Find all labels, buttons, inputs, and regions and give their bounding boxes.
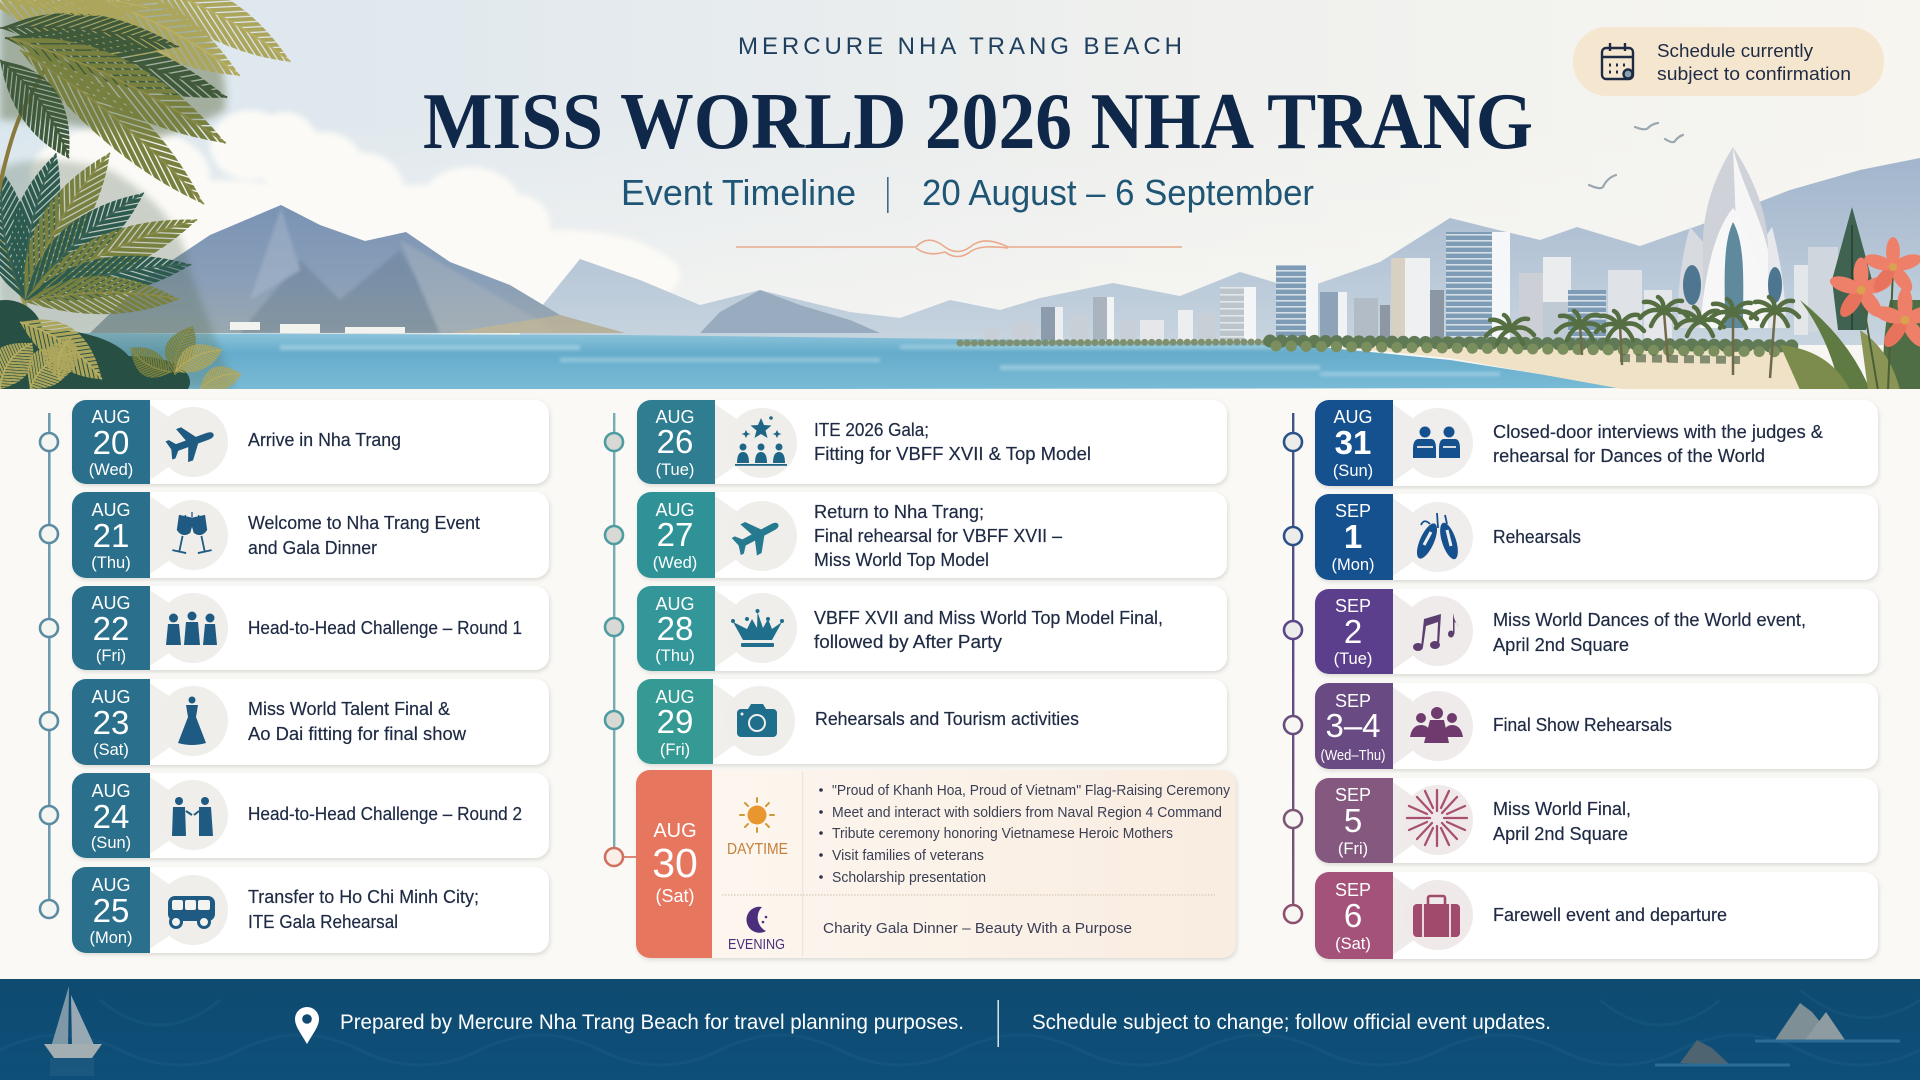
label: evening: EVENING	[728, 936, 785, 953]
badge text	[1657, 41, 1851, 84]
daytime activities list: Scholarship presentation	[832, 870, 986, 886]
date badge: 23	[93, 704, 129, 741]
date badge: SEP	[1335, 501, 1371, 521]
icon: champagne glasses	[150, 496, 228, 574]
event text: Ao Dai fitting for final show	[248, 724, 467, 744]
date badge: (Mon)	[89, 929, 133, 947]
icon: airplane	[715, 496, 797, 574]
daytime activities list	[819, 783, 1231, 886]
event text: Final rehearsal for VBFF XVII –	[814, 526, 1062, 546]
date badge: 6	[1344, 897, 1362, 934]
event text	[814, 608, 1163, 652]
date badge: 31	[1335, 424, 1371, 461]
date badge: (Sun)	[1333, 462, 1373, 480]
event text: rehearsal for Dances of the World	[1493, 446, 1765, 466]
event text: Farewell event and departure	[1493, 905, 1727, 925]
badge text: Schedule currently	[1657, 41, 1813, 61]
beach	[1040, 338, 1840, 390]
date badge: AUG	[91, 593, 131, 613]
date badge: (Tue)	[1334, 650, 1372, 668]
panel: Sep 6	[1315, 872, 1878, 959]
event text: Welcome to Nha Trang Event	[248, 513, 480, 533]
date badge	[72, 400, 150, 484]
date badge: (Fri)	[660, 741, 690, 759]
event text: and Gala Dinner	[248, 538, 377, 558]
header: subtitle: 20 August – 6 September	[922, 172, 1314, 213]
event text: Fitting for VBFF XVII & Top Model	[814, 444, 1091, 464]
icon: gown	[150, 683, 228, 761]
event text: Miss World Dances of the World event,	[1493, 610, 1806, 630]
timeline rail: column 3	[1284, 413, 1302, 923]
icon: crown	[715, 590, 797, 667]
event text: Miss World Talent Final &	[248, 699, 450, 719]
event text: Miss World Top Model	[814, 550, 989, 570]
date badge	[637, 492, 715, 578]
flowers and foliage bottom right	[1780, 237, 1920, 390]
panel: Aug 21	[72, 492, 549, 578]
sea	[0, 333, 1628, 390]
icon: ballet shoes	[1393, 498, 1473, 576]
date badge: SEP	[1335, 880, 1371, 900]
icon: bus	[150, 871, 228, 949]
event text: Arrive in Nha Trang	[248, 430, 401, 450]
event text: Head-to-Head Challenge – Round 2	[248, 804, 522, 824]
date badge: AUG	[91, 875, 131, 895]
event text	[814, 502, 1062, 570]
cathedral landmark	[1678, 147, 1786, 328]
date badge: AUG	[1333, 407, 1373, 427]
footer band	[0, 979, 1920, 1080]
date badge: (Sat)	[655, 886, 695, 906]
daytime activities list: Meet and interact with soldiers from Naval Region 4 Command	[832, 805, 1222, 821]
icon: star over figures	[715, 404, 797, 480]
daytime activities list: "Proud of Khanh Hoa, Proud of Vietnam" Flag-Raising Ceremony	[832, 783, 1231, 799]
panel: Aug 22	[72, 586, 549, 670]
event text: Miss World Final,	[1493, 799, 1631, 819]
icon: suitcase	[1393, 876, 1473, 955]
icon: airplane	[150, 404, 228, 480]
date badge	[1315, 683, 1393, 769]
date badge: SEP	[1335, 785, 1371, 805]
header: subtitle: Event Timeline	[621, 172, 856, 213]
badge text: subject to confirmation	[1657, 64, 1851, 84]
date badge: 26	[657, 423, 693, 460]
icon: fireworks	[1393, 782, 1473, 859]
foreground left mountains	[90, 205, 880, 333]
date badge: AUG	[655, 687, 695, 707]
event text: ITE 2026 Gala;	[814, 420, 929, 440]
palm fronds top left	[0, 0, 303, 216]
icon: calendar	[1602, 43, 1633, 79]
date badge: (Fri)	[96, 647, 126, 665]
header: subtitle	[621, 172, 1314, 213]
event text: Closed-door interviews with the judges &	[1493, 422, 1823, 442]
date badge: 28	[657, 610, 693, 647]
date badge: AUG	[91, 500, 131, 520]
date badge: 24	[93, 798, 129, 835]
panel: Sep 5	[1315, 778, 1878, 863]
date badge	[72, 586, 150, 670]
date badge: AUG	[91, 687, 131, 707]
event text	[248, 513, 480, 558]
date badge: (Mon)	[1331, 556, 1375, 574]
shoreline trees	[960, 297, 1800, 378]
icon: three contestants	[150, 590, 228, 666]
header illustration: Nha Trang bay	[0, 0, 1920, 414]
footer note: schedule change: Schedule subject to change; follow official event updates.	[1032, 1011, 1551, 1034]
sea reflections	[280, 345, 1500, 376]
event text: Return to Nha Trang;	[814, 502, 984, 522]
date badge: AUG	[91, 781, 131, 801]
event text: VBFF XVII and Miss World Top Model Final,	[814, 608, 1163, 628]
date badge: (Thu)	[655, 647, 695, 665]
timeline rail: column 1	[40, 413, 58, 918]
date badge: 1	[1344, 518, 1362, 555]
date badge: (Tue)	[656, 461, 694, 479]
event text: April 2nd Square	[1493, 635, 1629, 655]
panel: Aug 30 detailed program	[636, 770, 1236, 958]
date badge: (Wed–Thu)	[1320, 748, 1386, 764]
event text	[1493, 799, 1631, 844]
date badge: AUG	[655, 500, 695, 520]
daytime activities list: Tribute ceremony honoring Vietnamese Heroic Mothers	[832, 826, 1173, 842]
panel: Aug 23	[72, 679, 549, 765]
icon: rocks on the sea	[1655, 1003, 1900, 1065]
date badge: AUG	[655, 407, 695, 427]
event text	[248, 887, 479, 932]
header: venue line: MERCURE NHA TRANG BEACH	[738, 33, 1182, 60]
panel: Aug 20	[72, 400, 549, 484]
icon: music notes	[1393, 593, 1473, 670]
date badge: AUG	[655, 594, 695, 614]
daytime activities list: Visit families of veterans	[832, 848, 984, 864]
date badge: 25	[93, 892, 129, 929]
event text	[248, 699, 467, 744]
date badge: SEP	[1335, 596, 1371, 616]
panel: Sep 3–4	[1315, 683, 1878, 769]
panel: Aug 28	[637, 586, 1227, 671]
icon: two contestants facing	[150, 777, 228, 854]
event text: Rehearsals	[1493, 527, 1581, 547]
date badge	[1315, 872, 1393, 959]
icon: location pin	[295, 1007, 319, 1044]
date badge: 22	[93, 610, 129, 647]
icon: sailboat	[44, 986, 102, 1076]
date badge	[1315, 589, 1393, 674]
event text: Transfer to Ho Chi Minh City;	[248, 887, 479, 907]
date badge: (Sun)	[91, 834, 131, 852]
event text	[814, 420, 1091, 464]
date badge: 3–4	[1325, 707, 1381, 744]
panel: Aug 27	[637, 492, 1227, 578]
event text: Head-to-Head Challenge – Round 1	[248, 618, 522, 638]
timeline rail: column 2	[605, 413, 636, 866]
clouds	[30, 110, 680, 310]
seagulls	[1589, 123, 1683, 188]
date badge: SEP	[1335, 691, 1371, 711]
icon: group	[1393, 687, 1473, 765]
panel: Aug 31	[1315, 400, 1878, 486]
panel: Sep 1	[1315, 494, 1878, 580]
pine tree	[1832, 207, 1872, 330]
date badge: 20	[93, 424, 129, 461]
icon: moon	[746, 907, 767, 933]
sky	[0, 0, 1478, 334]
event text: Rehearsals and Tourism activities	[815, 709, 1079, 729]
date badge	[1315, 400, 1393, 486]
date badge	[72, 492, 150, 578]
date badge: 2	[1344, 613, 1362, 650]
header: ornament divider	[736, 240, 1182, 256]
date badge: 5	[1344, 802, 1362, 839]
date badge	[636, 770, 712, 958]
date badge: (Sat)	[93, 741, 129, 759]
date badge: (Wed)	[89, 461, 133, 479]
icon: sun	[740, 798, 774, 832]
skyline buildings	[985, 232, 1838, 343]
lower palm and bushes left	[0, 152, 242, 389]
date badge	[637, 586, 715, 671]
event text	[1493, 422, 1823, 466]
event text	[1493, 610, 1806, 655]
date badge	[637, 679, 713, 764]
distant mountains	[520, 158, 1920, 345]
icon: interview figures	[1393, 404, 1473, 482]
date badge	[1315, 778, 1393, 863]
evening activity: Charity Gala Dinner – Beauty With a Purpose	[823, 921, 1132, 937]
date badge: (Wed)	[653, 554, 697, 572]
panel: Aug 26	[637, 400, 1227, 484]
date badge: 27	[657, 516, 693, 553]
date badge: AUG	[91, 407, 131, 427]
date badge	[72, 773, 150, 858]
panel: Aug 25	[72, 867, 549, 953]
date badge: (Sat)	[1335, 935, 1371, 953]
panel: Sep 2	[1315, 589, 1878, 674]
header: main title: MISS WORLD 2026 NHA TRANG	[423, 78, 1533, 166]
event text: followed by After Party	[814, 632, 1002, 652]
date badge	[72, 867, 150, 953]
date badge	[637, 400, 715, 484]
footer waves	[0, 990, 1920, 1065]
date badge: (Fri)	[1338, 840, 1368, 858]
label: daytime: DAYTIME	[727, 841, 788, 858]
badge: schedule confirmation notice	[1573, 27, 1884, 96]
date badge: 29	[657, 703, 693, 740]
event text: Final Show Rehearsals	[1493, 715, 1672, 735]
date badge: 30	[652, 840, 698, 886]
date badge	[72, 679, 150, 765]
footer note: prepared by: Prepared by Mercure Nha Trang Beach for travel planning purposes.	[340, 1011, 964, 1034]
event text: ITE Gala Rehearsal	[248, 912, 398, 932]
date badge: AUG	[653, 820, 697, 842]
far shore town	[230, 322, 405, 333]
panel: Aug 24	[72, 773, 549, 858]
date badge	[1315, 494, 1393, 580]
icon: camera	[713, 683, 795, 760]
date badge: (Thu)	[91, 554, 131, 572]
event text: April 2nd Square	[1493, 824, 1628, 844]
date badge: 21	[93, 517, 129, 554]
panel: Aug 29	[637, 679, 1227, 764]
